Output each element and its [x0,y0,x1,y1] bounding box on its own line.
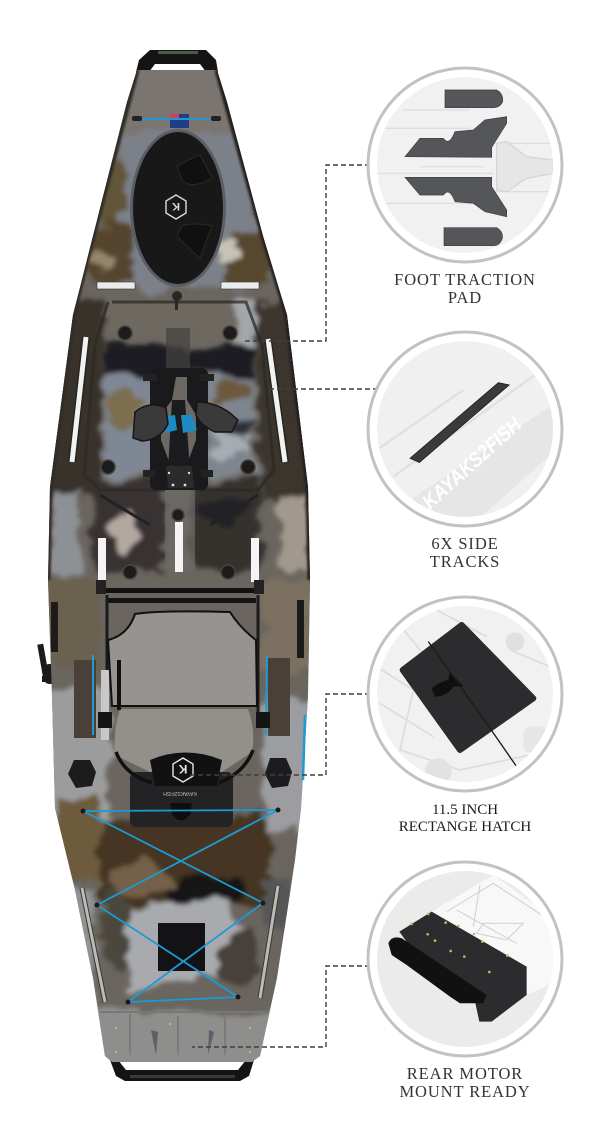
seat [108,611,257,827]
flush mount pods [68,758,292,788]
camo patches [48,70,310,1062]
side paddle knob [37,644,68,684]
seat strap [117,660,121,710]
heading: foot traction pad: FOOT TRACTION [394,270,536,289]
side tracks long [72,337,285,462]
deck sketch lines [373,110,550,203]
heading: rectangle hatch: RECTANGE HATCH [399,819,531,835]
traction pads [405,90,507,246]
dashed leader: hatch [190,694,378,775]
heading: foot traction pad: PAD [448,288,482,307]
heading: rectangle hatch: 11.5 INCH [432,802,498,818]
seat back [108,611,257,706]
stern handle [110,1060,254,1081]
seat front [150,752,222,786]
bow small tracks [97,282,259,289]
dashed leader: foot traction pad [245,165,378,341]
logo: KAYAKS2FISH [418,412,527,514]
dashed leader: side tracks [270,388,386,390]
stern gray [100,1011,265,1013]
hull [48,70,310,1062]
panel: foot traction pad [368,68,562,262]
heading: rear motor mount: MOUNT READY [399,1082,531,1101]
stern motor mount dash spots [115,1023,251,1053]
white deck [432,875,560,995]
clasp [432,672,463,697]
hull edge shading [48,70,137,580]
bow scupper [172,291,182,310]
panel: rectangle hatch [368,597,562,791]
heading: side tracks: TRACKS [430,552,500,571]
track [410,383,509,463]
heading: rear motor mount: REAR MOTOR [407,1064,523,1083]
rear hatch behind seat [130,772,233,827]
cockpit holes [101,326,255,579]
panel: side tracks [368,332,562,527]
front oval hatch [130,129,226,287]
rear rails [82,886,278,1002]
seat frame [96,580,264,720]
hatch lid [403,625,533,750]
center console [143,328,214,490]
foot pedals [133,402,238,441]
seat: KAYAKS2FISH [163,790,197,796]
bow handle [136,50,218,72]
seat cushion [115,709,253,772]
heading: side tracks: 6X SIDE [431,534,499,553]
kayak [20,40,340,1090]
bow bungee with flag [132,114,221,128]
dashed leader: motor mount [192,966,378,1047]
front oval hatch: K [172,200,180,212]
panel: rear motor mount [368,862,562,1056]
rear black plate [158,923,205,971]
seat: K [178,762,187,776]
side storage blocks [51,600,305,780]
bungee cords [83,810,278,1002]
center tracks [98,522,259,582]
motor mount [399,912,527,1022]
cockpit outline [84,302,274,490]
